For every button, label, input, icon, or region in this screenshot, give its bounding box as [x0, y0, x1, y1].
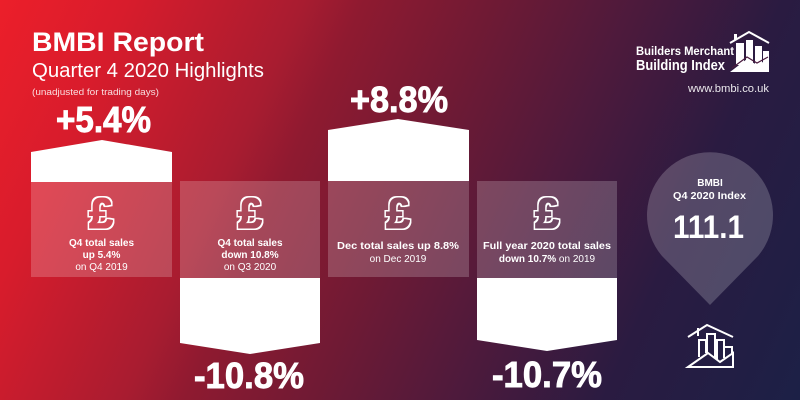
logo wordmark bottom line: Building Index: [636, 58, 725, 74]
caption: on Q4 2019: [75, 262, 128, 273]
up arrow: [328, 119, 469, 181]
title: BMBI Report: [32, 27, 204, 57]
caption: Full year 2020 total sales: [483, 241, 611, 252]
note: unadjusted: (unadjusted for trading days): [32, 87, 159, 97]
caption: [69, 238, 134, 273]
pin shape: [647, 152, 773, 305]
caption: up 5.4%: [83, 250, 120, 261]
column 1: Q4 total sales up: [31, 99, 172, 277]
column 2: Q4 total sales down: [180, 181, 320, 396]
index value: 111.1: [673, 209, 744, 245]
caption: Q4 total sales: [217, 238, 283, 249]
value: +8.8%: +8.8%: [350, 79, 448, 120]
up arrow: [31, 140, 172, 182]
index pin: [647, 152, 773, 305]
down arrow: [477, 278, 617, 351]
icon: pound: £: [386, 190, 410, 238]
panel: [180, 181, 320, 278]
down arrow: [180, 278, 320, 354]
caption: Dec total sales up 8.8%: [337, 241, 459, 252]
pin label: BMBI: [697, 178, 723, 189]
caption: [217, 238, 283, 273]
caption: [483, 241, 611, 265]
icon: house outline: [688, 325, 733, 367]
value: -10.7%: -10.7%: [492, 354, 602, 395]
caption: on Dec 2019: [370, 254, 427, 265]
icon: pound: £: [238, 190, 262, 238]
caption: Q4 total sales: [69, 238, 134, 249]
value: -10.8%: -10.8%: [194, 355, 304, 396]
subtitle: Quarter 4 2020 Highlights: [32, 60, 264, 82]
pin label second line: Q4 2020 Index: [673, 191, 746, 202]
panel: [31, 182, 172, 277]
caption: down 10.8%: [221, 250, 279, 261]
panel: [477, 181, 617, 278]
panel: [328, 181, 469, 277]
icon: pound: £: [535, 190, 559, 238]
logo icon: house with bars: [730, 32, 769, 72]
caption: down 10.7% on 2019: [499, 254, 596, 265]
caption: on Q3 2020: [224, 262, 277, 273]
icon: pound: £: [89, 190, 113, 238]
column 4: Full year total sales down: [477, 181, 617, 395]
website url: www.bmbi.co.uk: [687, 83, 769, 95]
column 3: Dec total sales up: [328, 79, 469, 277]
logo wordmark top line: Builders Merchant: [636, 46, 734, 58]
caption: [337, 241, 459, 265]
logo: Builders Merchant Building Index: [636, 32, 769, 74]
value: +5.4%: +5.4%: [56, 99, 151, 140]
